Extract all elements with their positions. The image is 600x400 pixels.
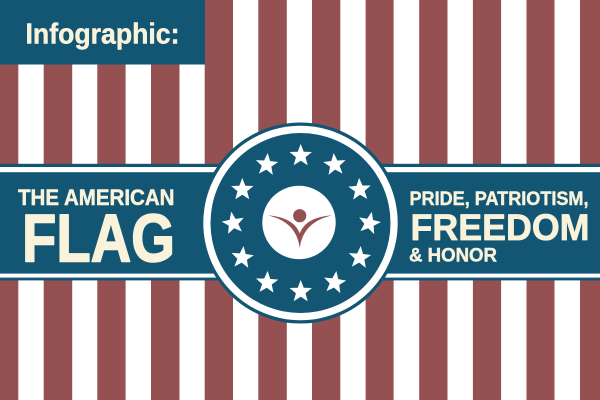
- emblem: circular seal: [200, 122, 401, 324]
- panel: infographic heading: [0, 0, 205, 64]
- heading text: Infographic:: [26, 18, 180, 50]
- center white disc with logo: [262, 186, 336, 259]
- icon: person with raised arms: [268, 209, 332, 248]
- banner text: the american flag: [18, 185, 175, 276]
- text: flag: FLAG: [22, 200, 175, 276]
- text: and honor: & HONOR: [409, 246, 497, 267]
- text: pride, patriotism: PRIDE, PATRIOTISM,: [410, 188, 588, 210]
- ring of stars: [220, 144, 383, 301]
- text: freedom: FREEDOM: [410, 206, 590, 248]
- text: the american: THE AMERICAN: [18, 185, 174, 210]
- panel: central banner: [0, 164, 600, 280]
- banner text: pride, patriotism, freedom and honor: [409, 188, 590, 267]
